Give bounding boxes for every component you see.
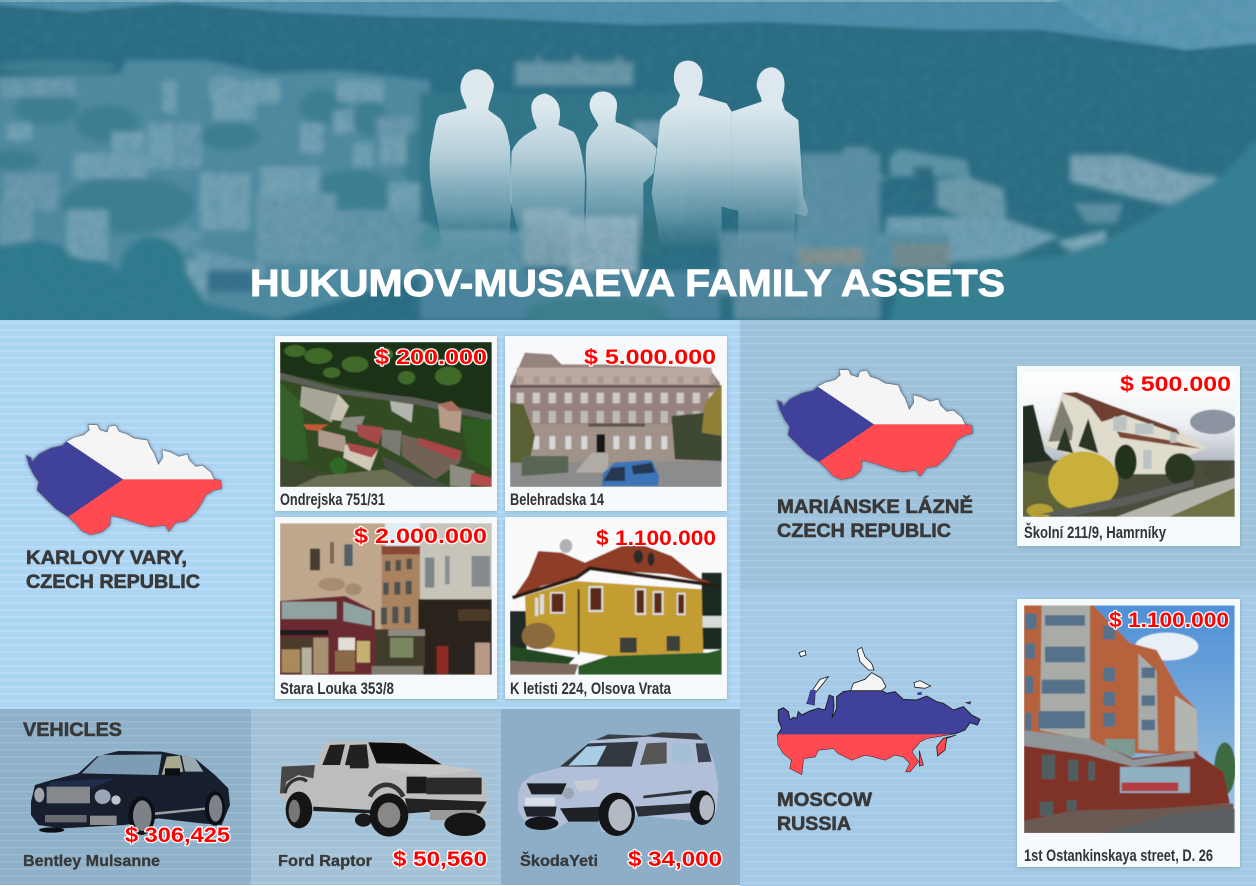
photo: Stara Louka street bbox=[280, 523, 492, 675]
address: Stara Louka 353/8 bbox=[280, 679, 394, 698]
location label: Karlovy Vary: CZECH REPUBLIC bbox=[26, 571, 200, 593]
card: K letisti 224 bbox=[505, 517, 727, 699]
photo: yellow house bbox=[510, 523, 722, 675]
price: $ 200.000 bbox=[375, 346, 487, 369]
photo: Moscow apartment block bbox=[1024, 605, 1236, 833]
location label: Moscow: RUSSIA bbox=[777, 813, 851, 835]
card: Ondrejska 751/31 bbox=[275, 336, 497, 511]
car image: Škoda Yeti bbox=[518, 732, 718, 836]
price: $ 1.100.000 bbox=[1109, 609, 1229, 632]
price: $ 306,425 bbox=[125, 824, 230, 847]
silhouettes of the five family members bbox=[430, 61, 808, 250]
car image: Ford Raptor bbox=[278, 741, 488, 837]
card: Stara Louka 353/8 bbox=[275, 517, 497, 699]
panel: Mariánské Lázně bbox=[740, 320, 1256, 590]
panel: Moscow bbox=[740, 590, 1256, 886]
silhouette: man left bbox=[430, 69, 512, 250]
panel: Karlovy Vary bbox=[0, 320, 740, 710]
location label: Karlovy Vary: KARLOVY VARY, bbox=[26, 547, 187, 569]
vehicle: Ford Raptor bbox=[278, 741, 488, 871]
price: $ 500.000 bbox=[1120, 373, 1231, 396]
car image: Bentley bbox=[31, 751, 230, 835]
address: Školní 211/9, Hamrníky bbox=[1024, 523, 1166, 542]
location label: Moscow: MOSCOW bbox=[777, 789, 873, 811]
location label: Mariánské Lázně: MARIÁNSKE LÁZNĚ bbox=[777, 494, 973, 518]
silhouette: youth bbox=[585, 92, 657, 250]
card: 1st Ostankinskaya street bbox=[1017, 599, 1240, 867]
vehicle: Bentley Mulsanne bbox=[23, 751, 230, 870]
silhouette: woman bbox=[510, 93, 585, 250]
price: $ 50,560 bbox=[393, 848, 487, 871]
location label: Mariánské Lázně bbox=[777, 494, 973, 542]
photo: villa with yellow bush bbox=[1023, 372, 1237, 518]
address: Belehradska 14 bbox=[510, 490, 604, 509]
silhouette: man right bbox=[732, 67, 808, 250]
panel: vehicles bbox=[0, 709, 740, 885]
map: Czech Republic flag, Karlovy Vary bbox=[24, 422, 224, 537]
map: Czech Republic flag, Mariánské Lázně bbox=[775, 367, 975, 482]
vehicle: Škoda Yeti bbox=[518, 732, 722, 871]
title: HUKUMOV-MUSAEVA FAMILY ASSETS bbox=[250, 263, 1005, 305]
photo: aerial view of Ondrejska bbox=[280, 342, 492, 487]
photo: Belehradska building bbox=[510, 342, 722, 487]
card: Belehradska 14 bbox=[505, 336, 727, 511]
price: $ 34,000 bbox=[628, 848, 722, 871]
heading: vehicles: VEHICLES bbox=[23, 719, 122, 741]
name: ŠkodaYeti bbox=[520, 851, 598, 870]
name: Bentley Mulsanne bbox=[23, 853, 160, 870]
silhouette: tall man bbox=[652, 61, 732, 250]
location label: Karlovy Vary bbox=[26, 547, 200, 593]
map: Russia flag, Moscow bbox=[770, 647, 987, 778]
address: Ondrejska 751/31 bbox=[280, 490, 385, 509]
price: $ 5.000.000 bbox=[584, 346, 716, 369]
card: Školní 211/9 bbox=[1017, 366, 1240, 546]
price: $ 1.100.000 bbox=[596, 527, 716, 550]
location label: Mariánské Lázně: CZECH REPUBLIC bbox=[777, 520, 951, 542]
name: Ford Raptor bbox=[278, 853, 372, 870]
price: $ 2.000.000 bbox=[354, 525, 487, 548]
address: K letisti 224, Olsova Vrata bbox=[510, 679, 671, 698]
panel: header banner with town photo bbox=[0, 0, 1256, 330]
location label: Moscow bbox=[777, 789, 873, 835]
